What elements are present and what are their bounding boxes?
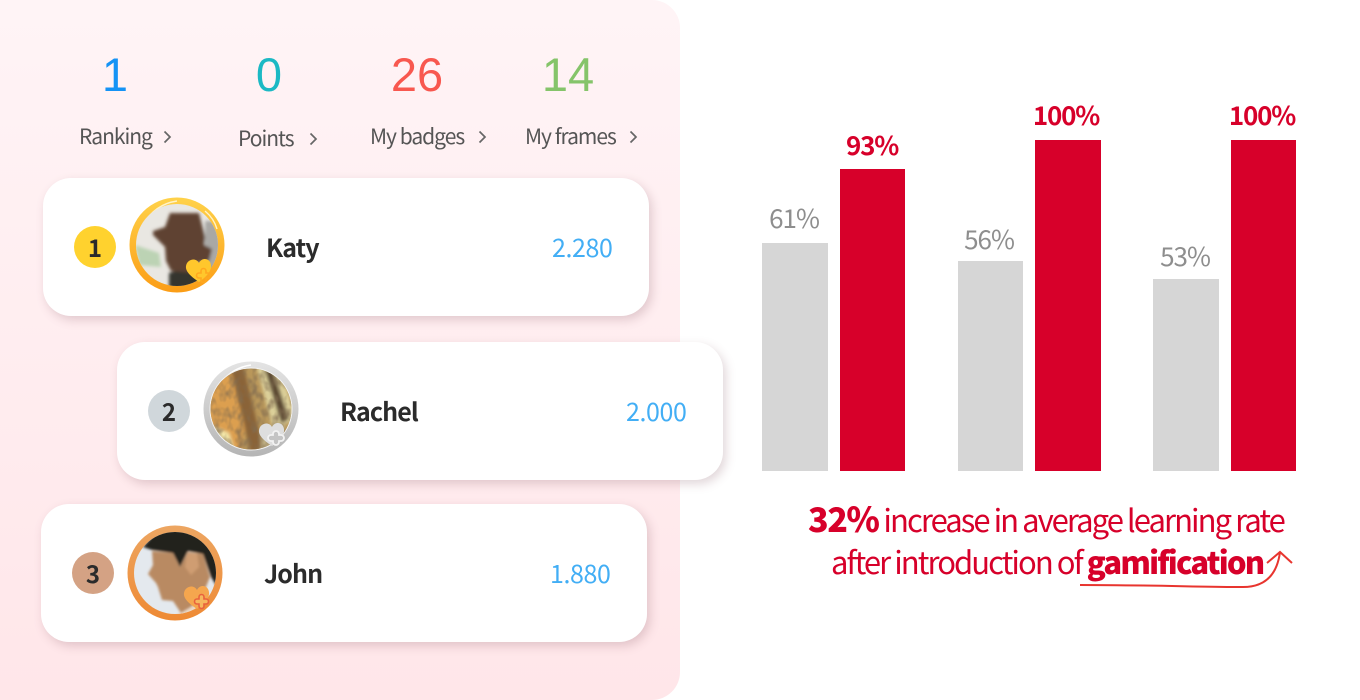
group 2 after bar (1035, 140, 1101, 471)
stat: ranking value: 1 (102, 48, 128, 101)
group 3 before label: 53% (1160, 237, 1210, 274)
label: frames: My frames (525, 121, 616, 151)
rank badge 3 (72, 552, 114, 594)
icon: ranking chevron (164, 130, 172, 144)
label: badges: My badges (370, 121, 464, 151)
group 2 before bar (958, 261, 1023, 471)
group 3 after label: 100% (1229, 96, 1295, 133)
heart badge (259, 423, 284, 446)
label: ranking: Ranking (79, 121, 152, 151)
rank badge 2 (148, 390, 190, 432)
card: Rachel (117, 342, 723, 480)
rank badge 2: 2 (162, 393, 176, 428)
group 3 before bar (1153, 279, 1219, 471)
stat: badges value: 26 (391, 48, 443, 101)
icon: frames chevron (630, 130, 638, 144)
group 1 after label: 93% (846, 126, 898, 163)
score: Rachel: 2.000 (626, 393, 686, 429)
caption line 1: 32% increase in average learning rate (808, 493, 1284, 542)
group 1 before label: 61% (769, 199, 819, 236)
heart badge (184, 586, 209, 609)
heart badge (186, 259, 211, 282)
card: Katy (43, 178, 649, 316)
avatar: Katy with gold frame (130, 198, 224, 292)
name: John: John (264, 555, 322, 591)
icon: points chevron (310, 132, 318, 146)
rank badge 3: 3 (86, 555, 100, 590)
group 3 after bar (1231, 140, 1296, 471)
bar chart: learning rate before and after (762, 96, 1296, 471)
rank badge 1 (74, 226, 116, 268)
score: John: 1.880 (550, 555, 610, 591)
group 2 before label: 56% (964, 220, 1014, 257)
arrow: rising underline (1080, 550, 1293, 588)
label: points: Points (238, 123, 294, 153)
caption line 2: after introduction of gamification (831, 538, 1263, 583)
stat: frames value: 14 (542, 48, 594, 101)
score: Katy: 2.280 (552, 229, 612, 265)
panel: leaderboard background (0, 0, 680, 700)
group 1 before bar (762, 243, 828, 471)
icon: badges chevron (479, 130, 486, 144)
stat: points value: 0 (256, 48, 282, 101)
avatar: John with bronze frame (128, 526, 222, 620)
group 1 after bar (840, 169, 905, 471)
group 2 after label: 100% (1033, 96, 1099, 133)
name: Rachel: Rachel (340, 393, 418, 429)
name: Katy: Katy (266, 229, 319, 265)
card: John (41, 504, 647, 642)
avatar: Rachel with silver frame (204, 362, 298, 456)
rank badge 1: 1 (88, 229, 102, 264)
